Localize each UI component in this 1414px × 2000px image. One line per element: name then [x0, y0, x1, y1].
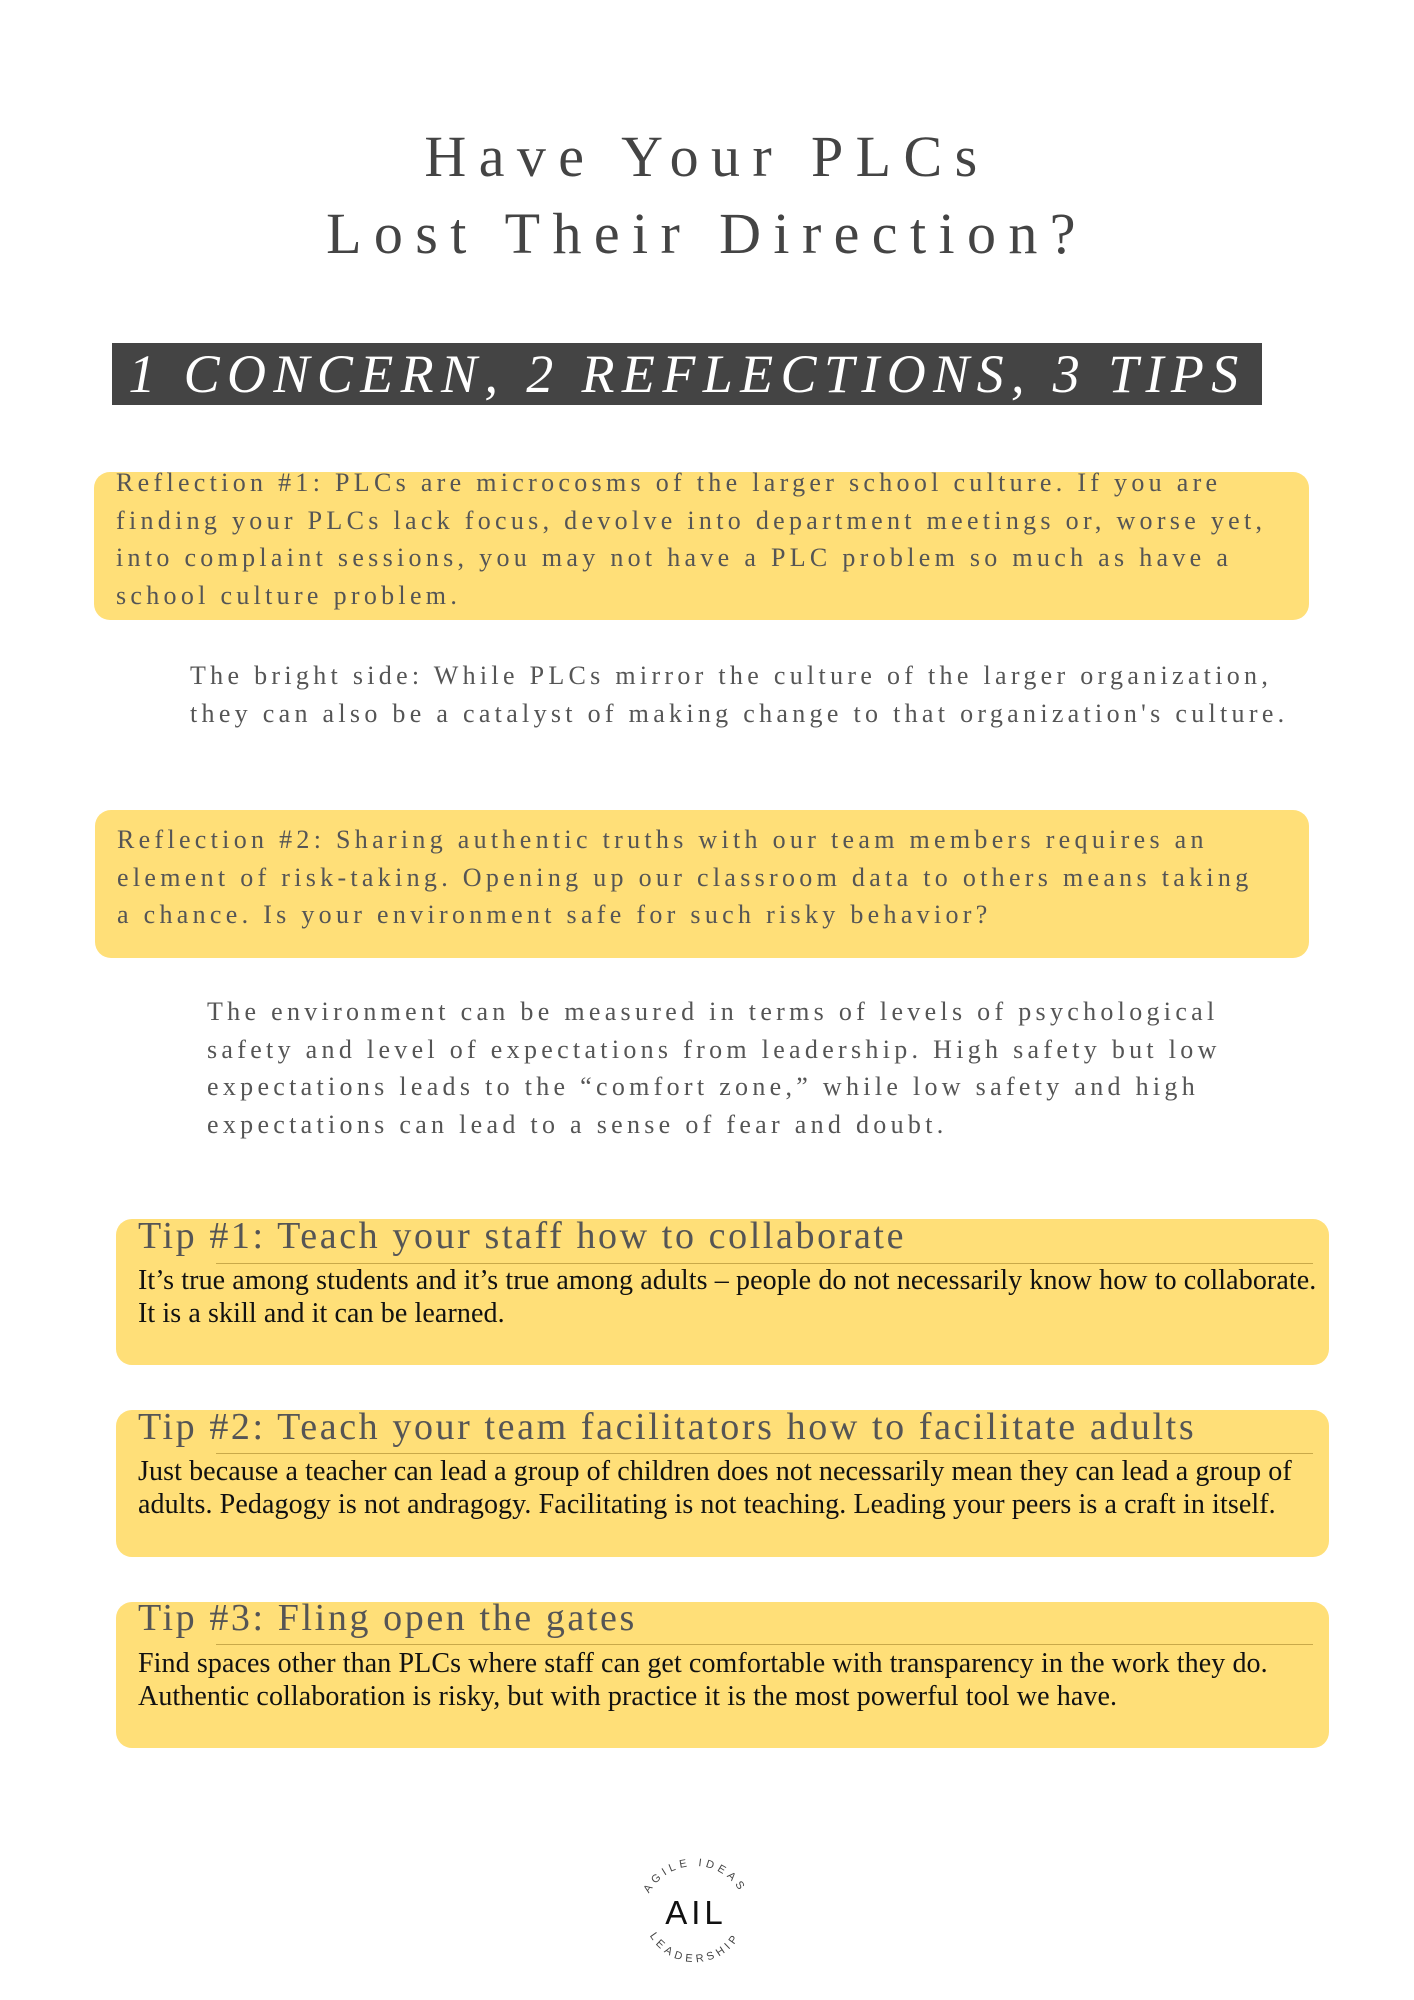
panel: tip 3 — [116, 1602, 1329, 1748]
panel: tip 1 — [116, 1219, 1329, 1365]
body: tip 2: adults. Pedagogy is not andragogy. Facilitating is not teaching. Leading your peers is a craft in itself. — [138, 1489, 1276, 1520]
heading: tip 1: Tip #1: Teach your staff how to collaborate — [138, 1215, 906, 1257]
body: tip 2: Just because a teacher can lead a group of children does not necessarily mean they can lead a group of — [138, 1456, 1292, 1487]
title: Have Your PLCs — [424, 124, 990, 189]
body: tip 3 — [138, 1648, 1268, 1712]
logo: AGILE IDEAS — [644, 1858, 744, 1894]
body: tip 1 — [138, 1265, 1316, 1329]
panel: tip 2 — [116, 1410, 1329, 1557]
text: bright side: The bright side: While PLCs mirror the culture of the larger organization, — [190, 661, 1272, 690]
body: tip 2 — [138, 1456, 1292, 1520]
text: reflection 2 — [117, 825, 1252, 929]
text: reflection 1 — [116, 468, 1266, 610]
text: environment: expectations leads to the “comfort zone,” while low safety and high — [207, 1072, 1199, 1101]
panel: reflection 2 — [95, 810, 1309, 958]
text: reflection 2: a chance. Is your environment safe for such risky behavior? — [117, 900, 992, 929]
text: reflection 1: school culture problem. — [116, 581, 461, 610]
text: environment: safety and level of expectations from leadership. High safety but low — [207, 1035, 1221, 1064]
text: reflection 1: finding your PLCs lack focus, devolve into department meetings or, worse yet, — [116, 506, 1266, 535]
text: reflection 1: into complaint sessions, you may not have a PLC problem so much as have a — [116, 543, 1232, 572]
body: tip 3: Authentic collaboration is risky, but with practice it is the most powerful tool we have. — [138, 1681, 1117, 1712]
body: tip 1: It’s true among students and it’s true among adults – people do not necessarily know how to collaborate. — [138, 1265, 1316, 1296]
logo: LEADERSHIP — [650, 1932, 735, 1962]
title: Lost Their Direction? — [326, 201, 1088, 266]
logo — [644, 1858, 744, 1962]
text: reflection 1: Reflection #1: PLCs are microcosms of the larger school culture. If you are — [116, 468, 1221, 497]
banner: 1 CONCERN, 2 REFLECTIONS, 3 TIPS — [128, 344, 1246, 404]
text: bright side — [190, 661, 1288, 728]
title — [326, 124, 1088, 266]
text: reflection 2: Reflection #2: Sharing authentic truths with our team members requires an — [117, 825, 1208, 854]
text: environment: expectations can lead to a sense of fear and doubt. — [207, 1110, 948, 1139]
text: environment: The environment can be measured in terms of levels of psychological — [207, 997, 1219, 1026]
text: bright side: they can also be a catalyst of making change to that organization's culture. — [190, 699, 1288, 728]
text: environment — [207, 997, 1221, 1139]
logo: AIL — [665, 1894, 727, 1931]
body: tip 1: It is a skill and it can be learned. — [138, 1298, 505, 1329]
panel: reflection 1 — [94, 472, 1309, 620]
body: tip 3: Find spaces other than PLCs where staff can get comfortable with transparency in the work they do. — [138, 1648, 1268, 1679]
heading: tip 3: Tip #3: Fling open the gates — [138, 1597, 637, 1639]
heading: tip 2: Tip #2: Teach your team facilitators how to facilitate adults — [138, 1406, 1196, 1448]
text: reflection 2: element of risk-taking. Opening up our classroom data to others means taking — [117, 863, 1252, 892]
